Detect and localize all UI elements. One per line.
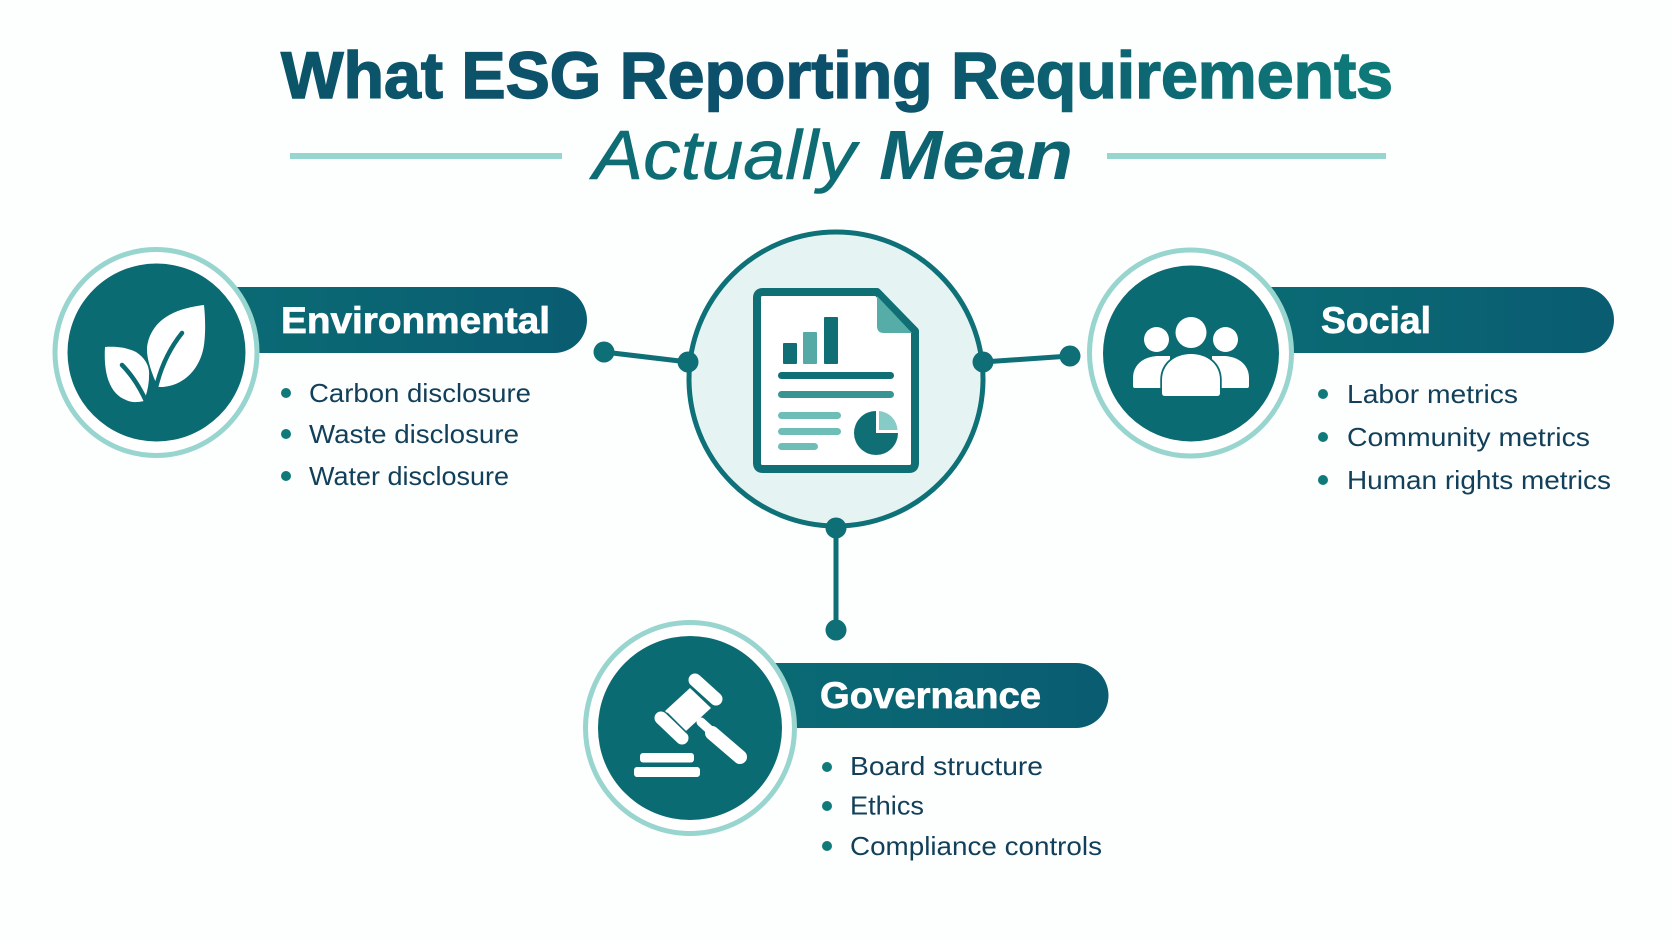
connector: center to governance [826,528,846,640]
title line 2: Actually [589,116,860,194]
pie chart [854,411,898,455]
title line 2 [589,116,1073,194]
icon: leaves [55,250,257,456]
icon: document [757,292,915,469]
heading pill [760,663,1108,728]
central report icon [678,232,994,538]
heading pill [1260,287,1614,353]
icon: gavel [586,622,794,834]
bullet list: Community metrics [1347,422,1590,452]
title line 2: Mean [879,116,1073,194]
icon: page fold [877,296,912,333]
bullet list: Waste disclosure [309,419,519,449]
text lines [778,372,894,450]
bullet list: Ethics [850,790,924,820]
title line 1: What ESG Reporting Requirements [281,38,1393,112]
bullet list [281,378,531,491]
bullet list [1318,379,1611,495]
bullet list [822,751,1102,861]
panel: social [1090,250,1614,495]
bar chart [783,317,838,364]
icon: people [1090,250,1292,456]
heading pill: Social [1321,300,1431,341]
heading pill: Governance [820,675,1041,716]
heading pill: Environmental [281,300,550,341]
panel: governance [586,622,1108,861]
bullet list: Compliance controls [850,831,1102,861]
bullet list: Board structure [850,751,1043,781]
bullet list: Human rights metrics [1347,465,1611,495]
heading pill [220,287,587,353]
bullet list: Water disclosure [309,461,509,491]
connector: center to social [983,346,1080,366]
bullet list: Labor metrics [1347,379,1518,409]
connector: center to environmental [594,342,688,362]
panel: environmental [55,250,587,491]
title [281,38,1393,194]
bullet list: Carbon disclosure [309,378,531,408]
